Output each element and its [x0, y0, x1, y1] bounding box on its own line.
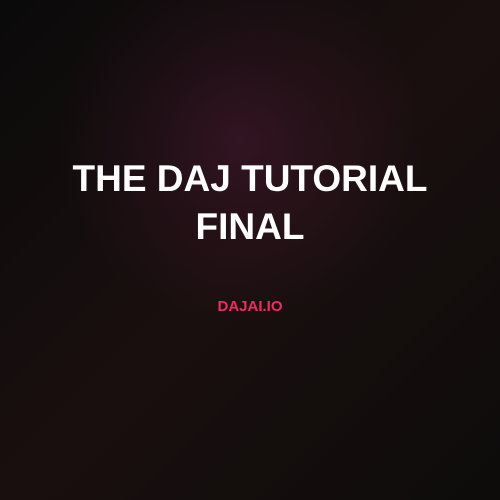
brand text: DAJAI.IO [217, 298, 282, 315]
title: THE DAJ TUTORIAL [73, 158, 427, 199]
title: FINAL [196, 206, 304, 247]
title [72, 158, 427, 247]
